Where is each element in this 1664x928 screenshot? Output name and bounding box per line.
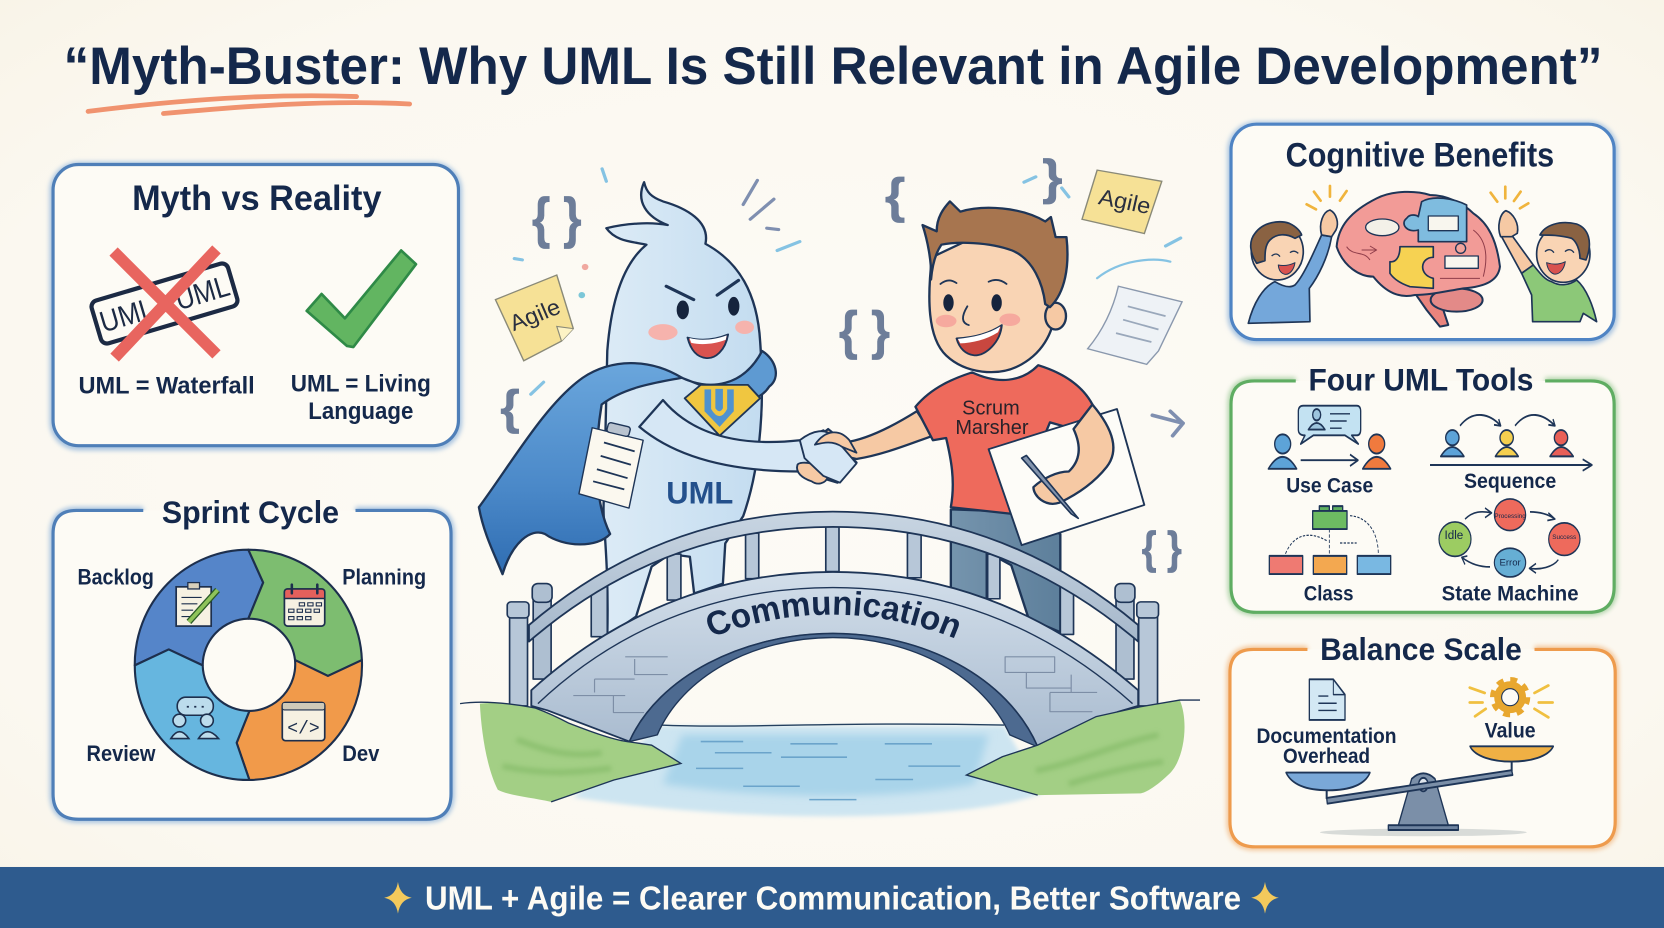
label: reality — [291, 371, 431, 425]
label: UML on body: UML — [666, 475, 733, 510]
panel: Four UML Tools — [1231, 362, 1614, 612]
head — [929, 235, 1056, 372]
label: reality: UML = Living — [291, 371, 431, 398]
bridge label: Communication — [707, 591, 959, 638]
panel: Cognitive Benefits — [1231, 124, 1614, 341]
panel: Myth vs Reality — [53, 164, 458, 447]
stone bridge labelled Communication — [506, 510, 1160, 746]
label: shirt text: Scrum — [962, 397, 1020, 419]
banner text: UML + Agile = Clearer Communication, Better Software — [425, 879, 1241, 916]
label: Class: Class — [1304, 583, 1354, 606]
heading: Four UML Tools: Four UML Tools — [1308, 362, 1533, 398]
water ripples — [696, 742, 960, 800]
face — [943, 294, 954, 311]
sticky note: Agile left — [495, 275, 573, 361]
label: myth: UML = Waterfall — [79, 373, 255, 400]
balance scale illustration — [1286, 679, 1553, 836]
icon: crossed-out UML stamp: UML — [171, 270, 234, 317]
ear — [1045, 303, 1066, 330]
segment: review — [135, 649, 249, 780]
segment: dev — [237, 660, 362, 780]
label: Backlog: Backlog — [77, 565, 154, 590]
cape — [479, 363, 682, 574]
title underline accent — [88, 96, 410, 114]
person: right, arm raised — [1499, 211, 1597, 322]
icon: sequence diagram — [1430, 415, 1592, 471]
face — [677, 300, 689, 319]
heading: Myth vs Reality: Myth vs Reality — [132, 179, 382, 218]
code braces: { } — [1142, 522, 1182, 573]
heading: Cognitive Benefits: Cognitive Benefits — [1286, 137, 1554, 175]
title: “Myth-Buster: Why UML Is Still Relevant in Agile Development” — [64, 37, 1602, 96]
clipboard — [579, 422, 643, 508]
label: Review: Review — [86, 741, 156, 766]
label: Documentation Overhead: Documentation — [1256, 725, 1397, 748]
bridge posts — [532, 584, 1135, 679]
state labels: Idle — [1444, 529, 1463, 542]
bridge top rail — [529, 512, 1138, 642]
bridge balusters — [591, 527, 1074, 637]
icon: green check mark — [307, 250, 416, 347]
icon: right star — [1251, 882, 1279, 914]
icon: state machine — [1439, 499, 1580, 577]
handshake hands — [797, 431, 856, 484]
body — [604, 182, 762, 637]
label: Use Case: Use Case — [1286, 474, 1373, 497]
heading: Sprint Cycle: Sprint Cycle — [162, 494, 339, 530]
label: reality: Language — [308, 398, 413, 425]
decorative motion marks — [514, 169, 1181, 394]
bridge outer posts — [507, 602, 1158, 706]
water — [573, 724, 1043, 816]
arrow — [1152, 411, 1183, 436]
icon: dev code window — [282, 702, 325, 741]
puzzle piece: blue — [1404, 198, 1467, 242]
sticky note: Agile left: Agile — [506, 294, 564, 336]
segment: backlog — [135, 550, 263, 665]
icon: gear with rays — [1470, 680, 1553, 717]
icon: crossed-out UML stamp: UML — [96, 292, 158, 339]
neck scarf — [682, 351, 776, 401]
character: UML mascot — [479, 182, 856, 637]
label: shirt text — [955, 397, 1028, 439]
panel: Balance Scale — [1230, 631, 1615, 847]
left pan — [1286, 773, 1370, 790]
icon: brain — [1337, 192, 1500, 327]
character: Scrum Master — [814, 201, 1144, 632]
icon: planning calendar — [284, 585, 325, 626]
emblem — [685, 385, 760, 436]
label: Sequence: Sequence — [1464, 470, 1556, 493]
code braces: { — [885, 168, 905, 223]
state labels: Processing — [1494, 513, 1526, 520]
state labels: Success — [1552, 534, 1576, 541]
tool icons — [1268, 406, 1592, 577]
right pan — [1470, 746, 1553, 762]
sticky note: Agile right — [1082, 170, 1162, 234]
puzzle piece: yellow — [1390, 247, 1433, 288]
label: Documentation Overhead — [1256, 725, 1397, 768]
code braces: { — [500, 381, 520, 434]
sticky note: Agile right: Agile — [1096, 184, 1153, 219]
code braces: { } — [839, 302, 890, 360]
left river bank — [460, 702, 681, 802]
pen — [1022, 455, 1078, 518]
icon: document — [1309, 679, 1345, 720]
icon: review discussion — [171, 697, 219, 739]
illustration: UML mascot and Scrum Master shaking hands on a bridge — [460, 149, 1200, 818]
segment: planning — [248, 550, 362, 676]
bridge brickwork — [573, 657, 1097, 713]
icon: backlog clipboard — [176, 583, 218, 626]
right river bank — [966, 700, 1200, 795]
chart: sprint cycle donut — [135, 550, 362, 780]
person: left, arm raised — [1248, 210, 1337, 323]
hair — [923, 201, 1067, 307]
code braces: { } — [532, 188, 582, 250]
label: Value: Value — [1485, 720, 1536, 743]
heading: Balance Scale: Balance Scale — [1320, 631, 1522, 667]
label: State Machine: State Machine — [1442, 583, 1579, 606]
state labels: Error — [1500, 558, 1522, 569]
label: Documentation Overhead: Overhead — [1283, 745, 1370, 768]
footer banner — [0, 867, 1664, 928]
icon: dev code window: </> — [287, 719, 320, 739]
icon: use case diagram — [1268, 406, 1391, 469]
code braces: } — [1042, 149, 1062, 204]
bridge deck and arch — [531, 572, 1138, 747]
icon: class diagram — [1269, 506, 1391, 574]
scale base and fulcrum — [1320, 773, 1527, 836]
t-shirt — [915, 365, 1092, 514]
icon: left star — [384, 882, 412, 914]
arm reaching for handshake — [814, 411, 933, 459]
trousers — [951, 509, 1060, 632]
icon: yellow sparkle rays — [1307, 186, 1528, 209]
state labels — [1444, 513, 1576, 569]
scale beam — [1327, 770, 1513, 804]
far arm and hand — [1033, 405, 1113, 504]
code braces — [500, 149, 1182, 573]
illustration: brain with puzzle pieces and two celebrating people — [1248, 186, 1597, 327]
arm — [639, 400, 856, 483]
icon: document page — [1088, 286, 1182, 364]
label: Planning: Planning — [342, 565, 426, 590]
panel: Sprint Cycle — [53, 494, 451, 819]
label: shirt text: Marsher — [955, 416, 1028, 439]
label: Dev: Dev — [342, 741, 380, 766]
notepad — [989, 409, 1144, 545]
icon: crossed-out UML stamp — [90, 249, 239, 358]
